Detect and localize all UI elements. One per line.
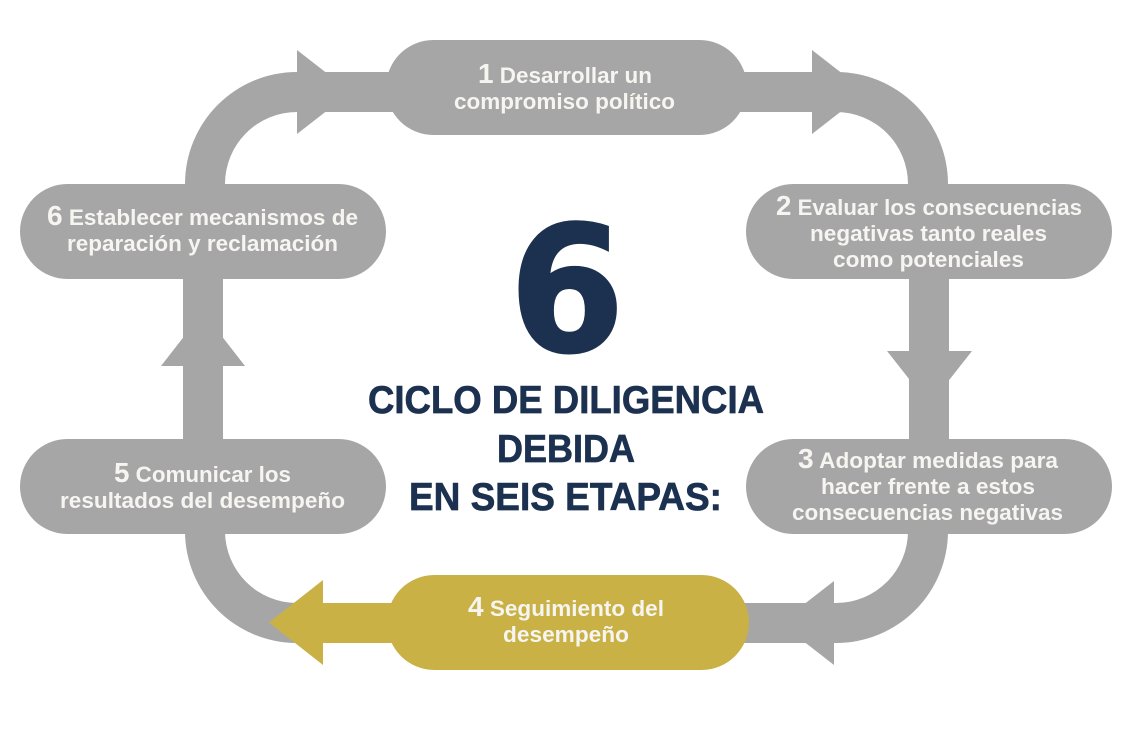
step 1 pill: compromiso político [454, 89, 675, 114]
step 3 pill: consecuencias negativas [792, 500, 1063, 525]
title: EN SEIS ETAPAS: [409, 476, 722, 519]
step 6 pill: 6 Establecer mecanismos de [47, 200, 358, 231]
step 4 pill, highlighted: 4 Seguimiento del [468, 591, 664, 622]
title [368, 379, 764, 519]
step 5 pill: 5 Comunicar los [114, 457, 291, 488]
step 3 pill: 3 Adoptar medidas para [798, 443, 1058, 474]
arrow: step 2 to step 3 [887, 270, 972, 450]
step 2 pill [746, 184, 1112, 279]
arrow: step 1 to step 2 [735, 50, 948, 200]
title: DEBIDA [497, 428, 635, 471]
step 1 pill [386, 40, 747, 135]
step 2 pill: 2 Evaluar los consecuencias [776, 190, 1082, 221]
step 3 pill: hacer frente a estos [821, 474, 1035, 499]
step 6 pill: reparación y reclamación [67, 231, 338, 256]
step 4 pill, highlighted [387, 575, 749, 670]
step 1 pill: 1 Desarrollar un [478, 58, 652, 89]
step 2 pill: como potenciales [833, 247, 1024, 272]
arrow: step 5 to step 6 [161, 270, 245, 450]
step 5 pill [20, 439, 386, 534]
step 6 pill [20, 184, 386, 279]
arrow: step 3 to step 4 [735, 525, 948, 665]
title: CICLO DE DILIGENCIA [368, 379, 764, 422]
step 3 pill [746, 439, 1112, 534]
step 4 pill, highlighted: desempeño [503, 622, 629, 647]
step 5 pill: resultados del desempeño [60, 488, 345, 513]
arrow: step 6 to step 1 [185, 50, 400, 200]
arrow: step 4 to step 5, grey curve [185, 525, 320, 643]
step 2 pill: negativas tanto reales [810, 221, 1047, 246]
cycle arrows [161, 50, 972, 665]
big number 6: 6 [509, 190, 625, 393]
arrow: step 4 to step 5, gold head [269, 580, 400, 665]
